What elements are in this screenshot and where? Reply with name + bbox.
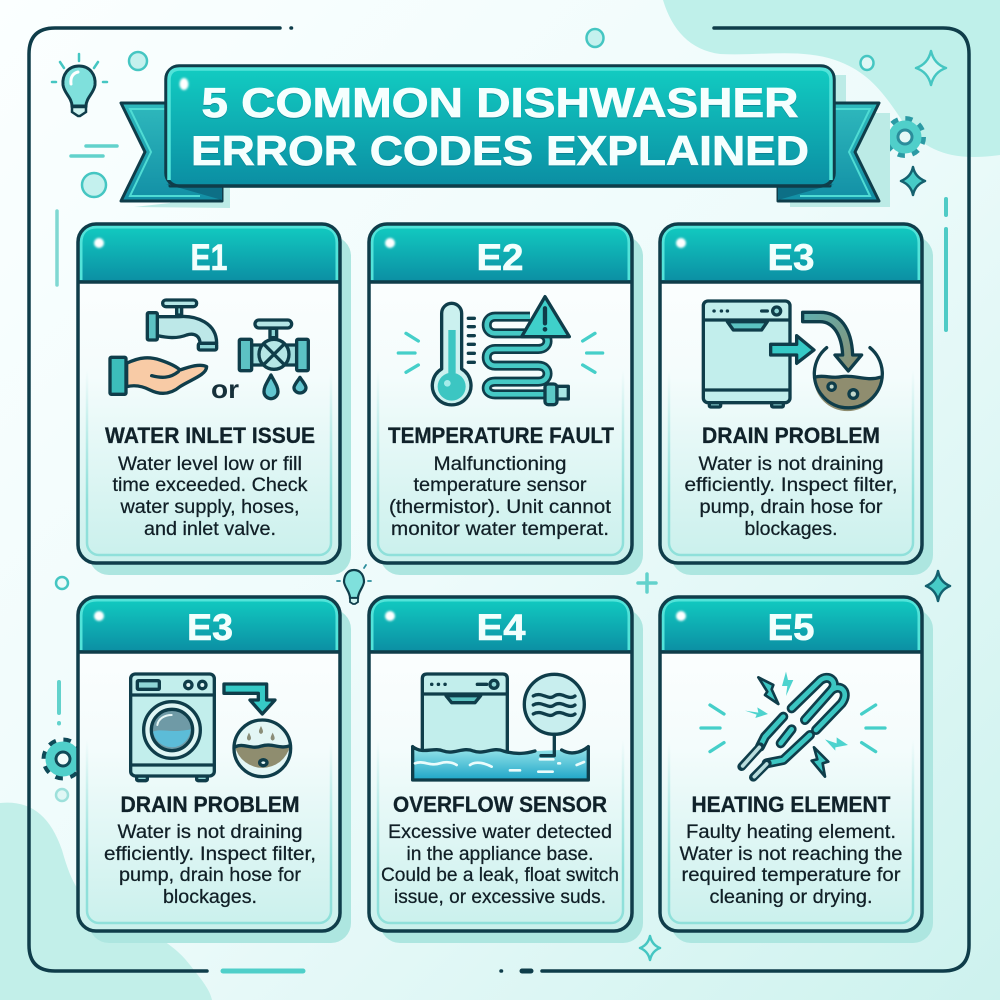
code label: E1 [190, 237, 228, 278]
body text: Excessive water detected [388, 821, 612, 843]
panel: E2 temperature fault [369, 224, 643, 575]
body text: and inlet valve. [144, 518, 276, 540]
accent lines left [55, 211, 59, 285]
banner body [166, 66, 834, 186]
body text: Water is not draining [698, 453, 884, 475]
body text [684, 453, 898, 540]
code label: E5 [768, 607, 814, 648]
heading: OVERFLOW SENSOR [393, 792, 607, 817]
icon: thermometer, heating coil and warning [398, 297, 603, 405]
accent lines right [944, 199, 948, 330]
heading: TEMPERATURE FAULT [388, 423, 615, 448]
panel: E4 overflow sensor [369, 597, 643, 943]
body text [680, 821, 902, 908]
panel: E5 heating element [660, 597, 933, 943]
body text: time exceeded. Check [112, 474, 308, 496]
background blob: top right [663, 0, 1000, 157]
heading: DRAIN PROBLEM [120, 792, 300, 817]
code label: E4 [476, 607, 526, 648]
ribbon tail rim: left [130, 109, 200, 196]
title text: ERROR CODES EXPLAINED [191, 128, 809, 175]
panel: E1 water inlet issue [78, 224, 351, 575]
icon: gear left [47, 743, 79, 775]
heading: DRAIN PROBLEM [702, 423, 880, 448]
body text: in the appliance base. [406, 843, 594, 865]
sparkle: bottom [640, 936, 660, 960]
icon: faucet, hand and valve [110, 300, 308, 399]
icon: broken heating element [701, 672, 885, 777]
title text: 5 COMMON DISHWASHER [202, 79, 798, 126]
icon: gear top right [890, 122, 920, 152]
background blob: bottom left [0, 803, 212, 1000]
body text: efficiently. Inspect filter, [684, 474, 898, 496]
title text [191, 79, 809, 175]
title text: ERROR CODES EXPLAINED [191, 127, 809, 174]
body text: temperature sensor [414, 474, 587, 496]
body text [112, 453, 308, 540]
or label: or [211, 374, 239, 404]
body text: issue, or excessive suds. [394, 886, 606, 908]
icon: washing machine draining into sludge [131, 674, 291, 781]
body text: Faulty heating element. [686, 821, 896, 843]
code label: E3 [187, 607, 233, 648]
body text: Malfunctioning [434, 453, 566, 475]
body text: blockages. [163, 886, 257, 908]
title banner [121, 66, 890, 208]
body text: pump, drain hose for [700, 496, 883, 518]
ribbon fold: left [166, 184, 222, 200]
ribbon tail: left [121, 103, 222, 201]
code label: E3 [768, 237, 814, 278]
heading: WATER INLET ISSUE [105, 423, 315, 448]
body text: efficiently. Inspect filter, [104, 843, 316, 865]
panel: E3 drain problem, washer [78, 597, 351, 943]
ribbon tail: right [778, 103, 879, 201]
body text: Water is not draining [118, 821, 302, 843]
banner highlight [180, 78, 188, 90]
bubbles [56, 29, 874, 801]
ribbon fold: right [778, 184, 834, 200]
body text: Water level low or fill [118, 453, 302, 475]
banner inner rim [169, 69, 831, 180]
body text: Could be a leak, float switch [381, 864, 619, 886]
body text: required temperature for [682, 864, 901, 886]
panel: E3 drain problem, dishwasher [660, 224, 933, 575]
code label: E2 [476, 237, 524, 278]
body text [389, 453, 612, 540]
banner shadow [134, 75, 890, 208]
icon: flooded dishwasher and water sensor [413, 674, 588, 780]
heading: HEATING ELEMENT [692, 792, 891, 817]
body text: Water is not reaching the [680, 843, 902, 865]
sparkle: dark right [901, 167, 925, 195]
icon: small light bulb middle [337, 565, 371, 604]
dashes left of banner [71, 146, 117, 156]
icon: plus [638, 574, 656, 592]
body text: cleaning or drying. [710, 886, 872, 908]
body text: monitor water temperat. [391, 518, 609, 540]
title text: 5 COMMON DISHWASHER [202, 80, 798, 127]
body text [104, 821, 316, 908]
icon: dishwasher draining into sludge [703, 301, 882, 411]
body text: water supply, hoses, [119, 496, 300, 518]
ribbon tail rim: right [800, 109, 870, 196]
body text: blockages. [744, 518, 838, 540]
body text: (thermistor). Unit cannot [389, 496, 612, 518]
body text [381, 821, 619, 908]
icon: light bulb top left [52, 54, 107, 116]
sparkle: dark middle right [926, 571, 950, 601]
sparkle: outline top right [916, 51, 946, 85]
body text: pump, drain hose for [119, 864, 302, 886]
